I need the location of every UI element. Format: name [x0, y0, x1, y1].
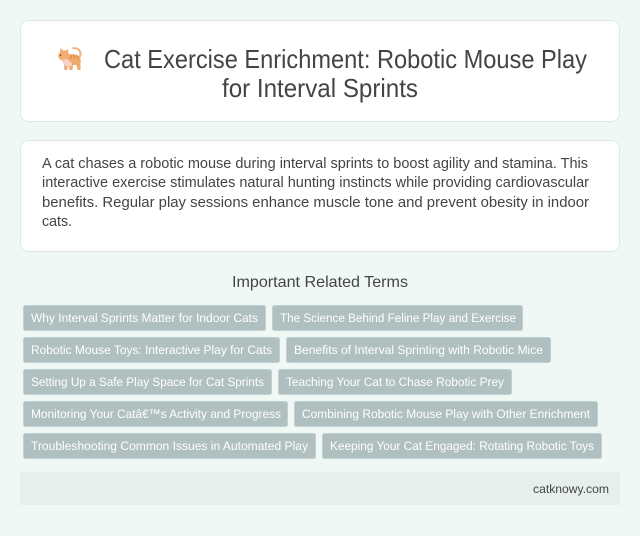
- title: for Interval Sprints: [222, 73, 418, 103]
- tag: Robotic Mouse Toys: Interactive Play for Cats: [31, 343, 272, 357]
- tag: Why Interval Sprints Matter for Indoor Cats: [31, 311, 258, 325]
- tag: Combining Robotic Mouse Play with Other Enrichment: [302, 407, 591, 421]
- title: [104, 44, 587, 103]
- tag: The Science Behind Feline Play and Exercise: [280, 311, 516, 325]
- tag: [24, 338, 280, 362]
- tag: [322, 434, 602, 458]
- tag: Monitoring Your Catâ€™s Activity and Progress: [31, 407, 281, 421]
- panel: title card: [20, 20, 620, 122]
- text block: summary: [42, 156, 589, 230]
- tag: Benefits of Interval Sprinting with Robotic Mice: [294, 343, 543, 357]
- icon: cat: [58, 47, 82, 70]
- tag: [24, 434, 316, 458]
- tag: [294, 402, 598, 426]
- tag: Teaching Your Cat to Chase Robotic Prey: [286, 375, 505, 389]
- tags list: [24, 306, 602, 458]
- tag: Keeping Your Cat Engaged: Rotating Robotic Toys: [330, 439, 594, 453]
- heading: related terms: Important Related Terms: [232, 274, 408, 291]
- tag: [24, 402, 288, 426]
- tag: [24, 306, 266, 330]
- tag: [286, 338, 550, 362]
- text block: summary: interactive exercise stimulates natural hunting instincts while providing cardiovascular: [42, 175, 589, 191]
- footer: [20, 472, 620, 505]
- tag: [24, 370, 272, 394]
- tag: Setting Up a Safe Play Space for Cat Sprints: [31, 375, 264, 389]
- text block: summary: A cat chases a robotic mouse during interval sprints to boost agility and stamina. This: [42, 156, 588, 172]
- title: Cat Exercise Enrichment: Robotic Mouse Play: [104, 44, 587, 74]
- footer source: catknowy.com: [533, 482, 609, 496]
- panel: summary: [20, 140, 620, 252]
- text block: summary: benefits. Regular play sessions enhance muscle tone and prevent obesity in indoor: [42, 195, 589, 211]
- tag: Troubleshooting Common Issues in Automated Play: [31, 439, 309, 453]
- text block: summary: cats.: [42, 214, 72, 230]
- tag: [278, 370, 512, 394]
- tag: [272, 306, 522, 330]
